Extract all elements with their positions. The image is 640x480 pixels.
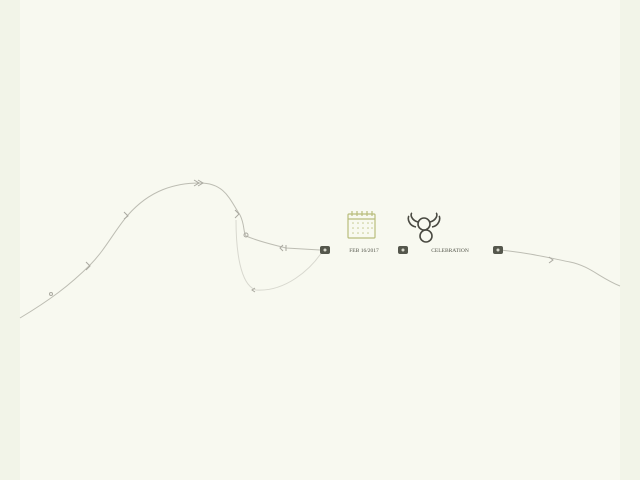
curve markers: [50, 180, 553, 296]
label: celebration: CELEBRATION: [431, 248, 469, 254]
timeline curve: [20, 183, 620, 318]
icon: calendar: [348, 211, 375, 238]
node badges: [320, 246, 503, 254]
icon: celebration figure: [408, 213, 440, 242]
label: date: FEB 16/2017: [349, 248, 379, 254]
